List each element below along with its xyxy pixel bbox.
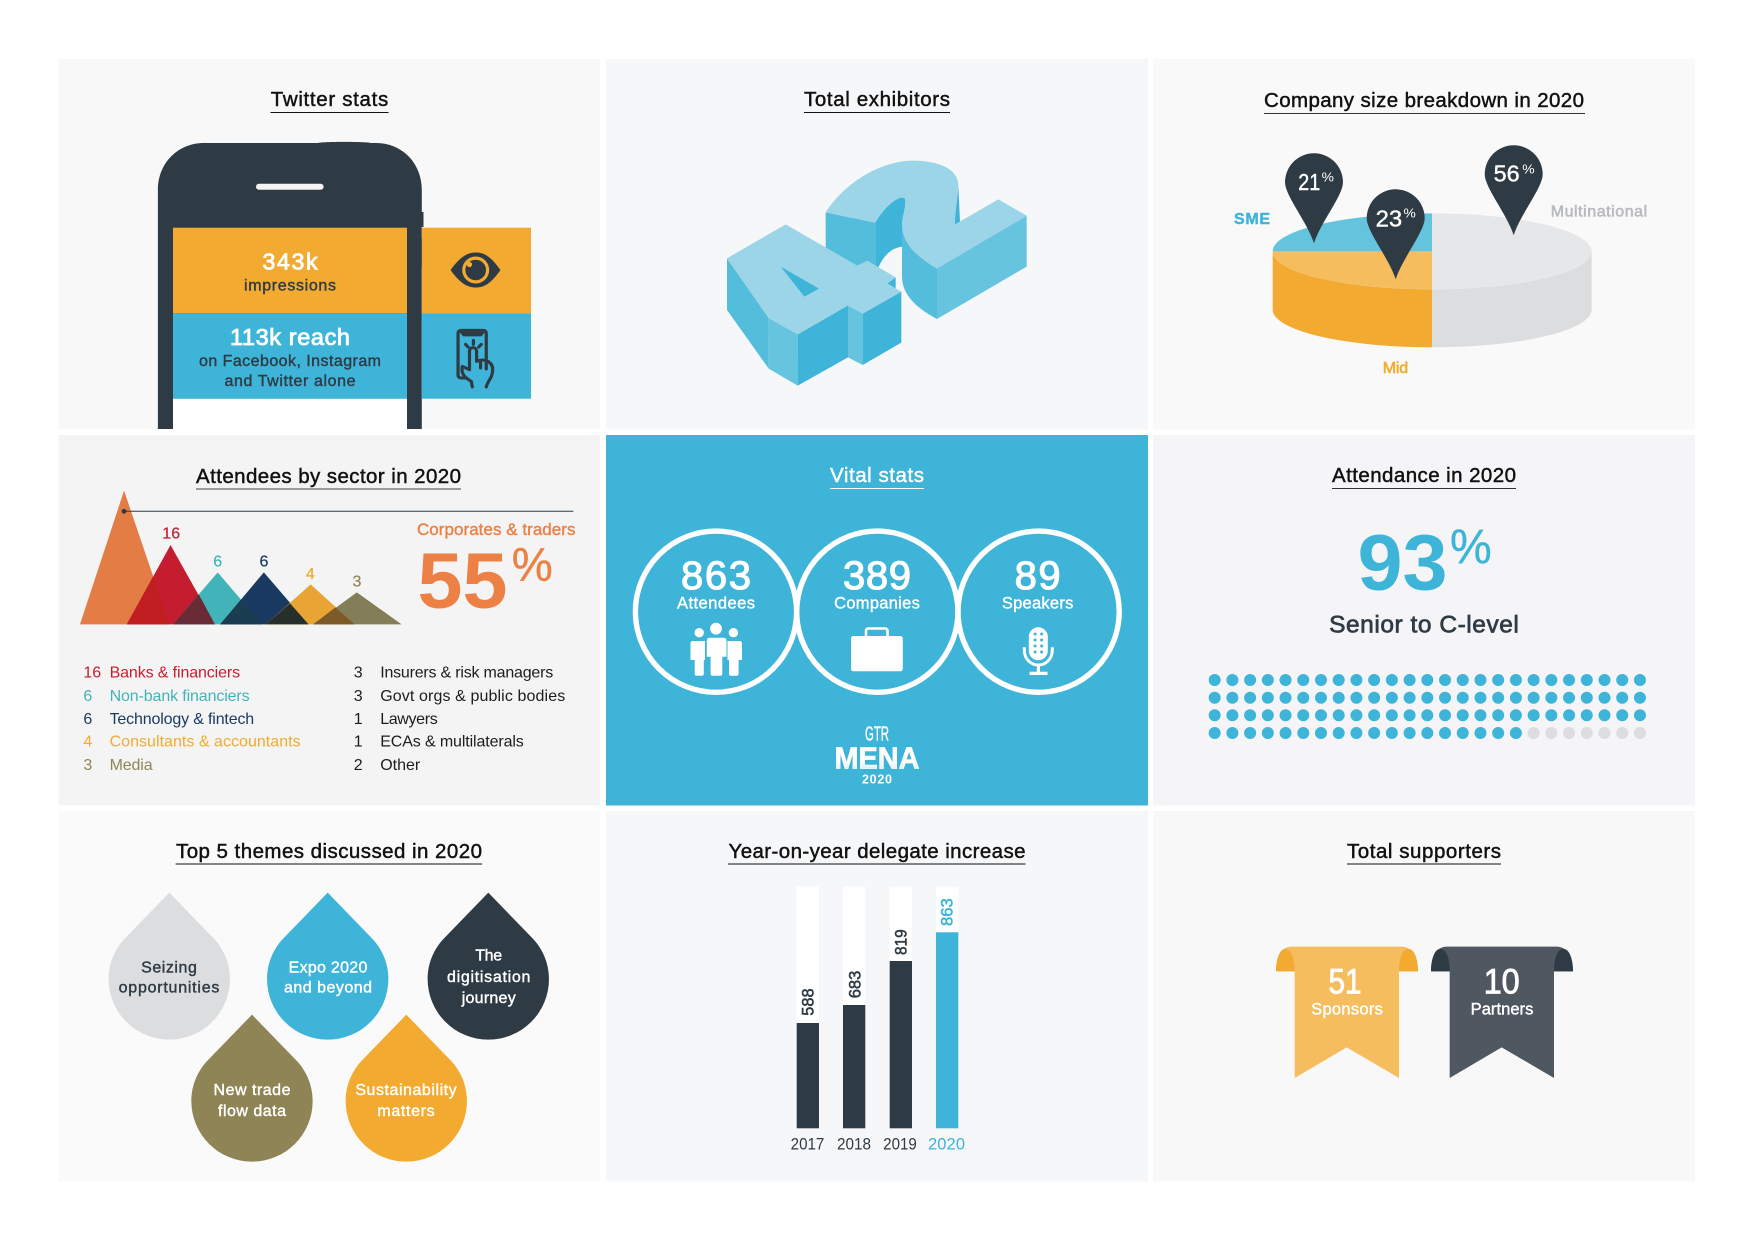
pin: 56 percent multinational: 56 — [1494, 161, 1520, 187]
logo: GTR MENA 2020 — [834, 724, 920, 786]
stat: 93 percent — [1358, 517, 1492, 606]
legend: right column: 1 — [354, 711, 363, 728]
panel: year-on-year delegate increase — [606, 811, 1148, 1182]
legend: left column: 6 — [83, 711, 92, 728]
drop: expo 2020 and beyond — [267, 893, 388, 1040]
legend: left column: 4 — [83, 734, 92, 751]
chart: delegate bars: 683 — [847, 971, 865, 998]
drop: the digitisation journey — [428, 893, 549, 1040]
panel: total supporters — [1153, 811, 1695, 1182]
legend: right column: 3 — [354, 688, 363, 705]
drop: the digitisation journey: digitisation — [447, 969, 530, 986]
stat: impressions band: 343k — [262, 248, 318, 274]
legend: right column: Govt orgs & public bodies — [380, 688, 565, 705]
panel: twitter stats — [58, 59, 600, 430]
callout: corporates and traders 55 percent — [417, 520, 576, 624]
legend: right column — [354, 665, 565, 774]
triangle values: 6 — [213, 554, 222, 571]
triangle values: 4 — [306, 566, 315, 583]
pin: 23 percent mid: % — [1404, 206, 1416, 221]
legend: right column: Insurers & risk managers — [380, 665, 553, 682]
ribbon: partners — [1431, 947, 1573, 1078]
drop: new trade flow data: New trade — [214, 1082, 291, 1099]
panel: top 5 themes — [58, 811, 600, 1182]
label: mid: Mid — [1383, 360, 1408, 377]
panel: vital stats — [606, 435, 1148, 806]
stat: reach band: and Twitter alone — [224, 373, 356, 390]
chart: sector triangles — [80, 491, 402, 624]
callout: corporates and traders 55 percent: 55 — [418, 535, 508, 624]
stat: reach band: on Facebook, Instagram — [199, 353, 381, 370]
callout: corporates and traders 55 percent: Corporates & traders — [417, 520, 576, 539]
chart: 3D pie — [1273, 213, 1592, 347]
icon: smartphone — [158, 142, 424, 429]
icon: people — [690, 623, 742, 676]
legend: left column: 16 — [83, 665, 101, 682]
drop: expo 2020 and beyond: Expo 2020 — [289, 960, 367, 977]
heading: total exhibitors: Total exhibitors — [804, 88, 950, 111]
chart: delegate bars: 863 — [939, 898, 957, 926]
stat: 93 percent: % — [1450, 521, 1492, 574]
heading: total supporters: Total supporters — [1347, 840, 1501, 863]
triangle values: 3 — [353, 574, 362, 591]
heading: vital stats: Vital stats — [830, 464, 924, 487]
chart: delegate bars — [791, 887, 965, 1153]
legend: left column: Non-bank financiers — [110, 688, 250, 705]
stat: speakers: 89 — [1015, 554, 1061, 598]
stat: impressions band: impressions — [244, 278, 336, 295]
stat: 93 percent: 93 — [1358, 517, 1448, 606]
pin: 56 percent multinational — [1485, 145, 1543, 235]
legend: right column: Lawyers — [380, 711, 438, 728]
stat: speakers: Speakers — [1002, 595, 1073, 613]
text: senior to C-level: Senior to C-level — [1329, 612, 1519, 639]
drop: new trade flow data — [191, 1015, 313, 1162]
ribbon: sponsors — [1276, 947, 1418, 1078]
drop: seizing opportunities: Seizing — [141, 960, 197, 977]
chart: delegate bars: 2020 — [928, 1135, 965, 1153]
legend: left column: 3 — [83, 757, 92, 774]
ribbon: partners: 10 — [1484, 962, 1520, 1001]
icon: tapping phone — [458, 330, 493, 387]
heading: top 5 themes: Top 5 themes discussed in 2020 — [176, 840, 482, 863]
chart: delegate bars: 2018 — [837, 1135, 871, 1153]
triangle values: 6 — [259, 554, 268, 571]
label: SME: SME — [1234, 211, 1270, 228]
chart: delegate bars: 2017 — [791, 1135, 824, 1153]
leader line — [122, 509, 573, 514]
pin: 21 percent SME: % — [1322, 170, 1334, 185]
drop: sustainability matters: Sustainability — [355, 1082, 457, 1099]
chart: delegate bars: 2019 — [883, 1135, 917, 1153]
logo: GTR MENA 2020: MENA — [834, 741, 920, 776]
drop: the digitisation journey: The — [475, 948, 502, 965]
heading: attendance: Attendance in 2020 — [1332, 464, 1516, 487]
callout: corporates and traders 55 percent: % — [512, 538, 553, 591]
stat: impressions band — [173, 228, 531, 313]
stat: attendees: Attendees — [677, 595, 755, 613]
logo: GTR MENA 2020: GTR — [865, 724, 889, 746]
drop: sustainability matters — [346, 1015, 467, 1162]
pin: 21 percent SME: 21 — [1298, 169, 1320, 195]
legend: right column: 1 — [354, 734, 363, 751]
legend: left column — [83, 665, 301, 774]
panel: attendees by sector — [58, 435, 600, 806]
stat: attendees: 863 — [681, 554, 751, 598]
triangle values: 16 — [162, 526, 180, 543]
pin: 56 percent multinational: % — [1522, 161, 1535, 176]
chart: dot matrix — [1215, 680, 1640, 733]
chart: delegate bars: 588 — [799, 988, 817, 1016]
pin: 23 percent mid — [1367, 189, 1425, 279]
panel: company size breakdown — [1153, 59, 1695, 430]
stat: attendees — [677, 554, 755, 676]
panel: total exhibitors — [606, 59, 1148, 430]
stat: companies — [834, 554, 920, 671]
drop: the digitisation journey: journey — [461, 990, 516, 1007]
legend: right column: ECAs & multilaterals — [380, 734, 524, 751]
icon: briefcase — [851, 628, 903, 671]
stat: reach band — [173, 313, 531, 399]
stat: reach band: 113k reach — [230, 324, 350, 350]
heading: company size: Company size breakdown in 2020 — [1264, 89, 1584, 112]
drop: seizing opportunities: opportunities — [119, 980, 219, 997]
legend: left column: 6 — [83, 688, 92, 705]
stat: companies: 389 — [843, 554, 911, 598]
pin: 23 percent mid: 23 — [1376, 206, 1402, 232]
legend: right column: Other — [380, 757, 421, 774]
triangle values — [162, 526, 362, 591]
ribbon: sponsors: Sponsors — [1311, 1000, 1383, 1018]
panel: attendance in 2020 — [1153, 435, 1695, 806]
icon: eye — [450, 252, 500, 288]
label: multinational: Multinational — [1551, 204, 1647, 221]
legend: left column: Media — [110, 757, 153, 774]
legend: left column: Technology & fintech — [110, 711, 254, 728]
chart: delegate bars: 819 — [893, 929, 911, 955]
legend: right column: 3 — [354, 665, 363, 682]
heading: twitter stats: Twitter stats — [271, 88, 388, 111]
ribbon: partners: Partners — [1471, 1000, 1533, 1018]
ribbon: sponsors: 51 — [1328, 962, 1362, 1001]
graphic: isometric number 42 — [727, 161, 1027, 386]
drop: sustainability matters: matters — [377, 1103, 435, 1120]
stat: speakers — [1002, 554, 1073, 675]
circles — [635, 531, 1119, 692]
drop: seizing opportunities — [109, 893, 230, 1040]
drop: new trade flow data: flow data — [218, 1103, 286, 1120]
legend: left column: Banks & financiers — [110, 665, 240, 682]
pin: 21 percent SME — [1285, 153, 1343, 243]
logo: GTR MENA 2020: 2020 — [862, 772, 892, 786]
stat: companies: Companies — [834, 595, 920, 613]
heading: year on year: Year-on-year delegate increase — [728, 840, 1026, 863]
drop: expo 2020 and beyond: and beyond — [284, 980, 372, 997]
legend: left column: Consultants & accountants — [110, 734, 301, 751]
icon: microphone — [1024, 627, 1052, 675]
heading: attendees by sector: Attendees by sector in 2020 — [196, 465, 461, 488]
legend: right column: 2 — [354, 757, 363, 774]
